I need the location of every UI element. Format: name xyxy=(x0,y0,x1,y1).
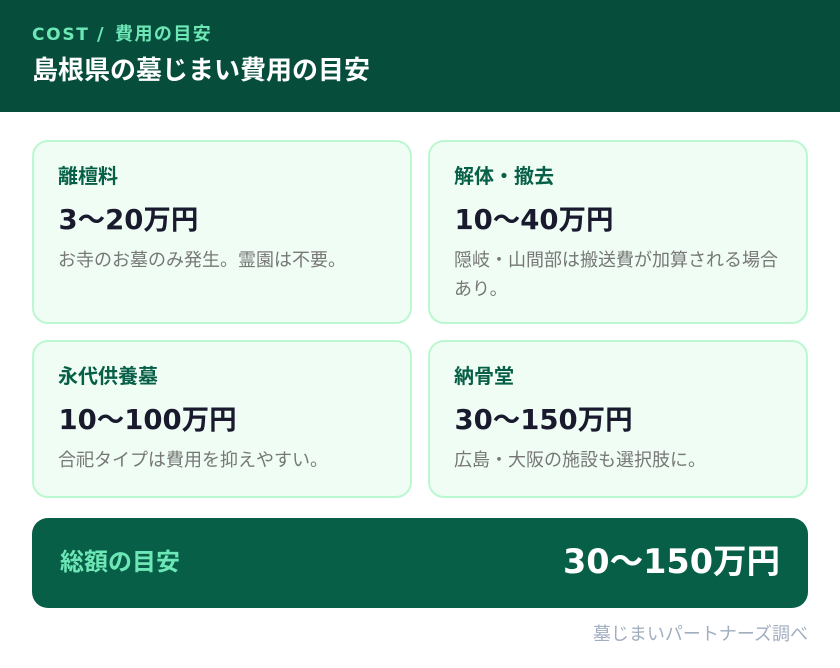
eyebrow label: / xyxy=(97,24,104,45)
label: 永代供養墓 xyxy=(58,364,158,388)
title: 島根県の墓じまい費用の目安 xyxy=(32,56,370,86)
value: 3〜20万円 xyxy=(58,204,198,236)
panel: 永代供養墓 xyxy=(32,340,412,498)
value: 10〜100万円 xyxy=(58,404,237,436)
panel: 離檀料 xyxy=(32,140,412,324)
panel: 解体・撤去 xyxy=(428,140,808,324)
total value: 30〜150万円 xyxy=(563,542,780,581)
header band xyxy=(0,0,840,112)
note: 隠岐・山間部は搬送費が加算される場合あり。 xyxy=(454,250,778,300)
eyebrow label: 費用の目安 xyxy=(115,24,212,45)
note: 合祀タイプは費用を抑えやすい。 xyxy=(58,450,328,471)
value: 10〜40万円 xyxy=(454,204,614,236)
label: 離檀料 xyxy=(58,164,118,188)
total bar xyxy=(32,518,808,608)
label: 納骨堂 xyxy=(454,364,514,388)
total label: 総額の目安 xyxy=(60,548,180,576)
eyebrow label: COST xyxy=(32,25,90,45)
eyebrow label xyxy=(32,24,212,45)
note: 広島・大阪の施設も選択肢に。 xyxy=(454,450,706,471)
source note: 墓じまいパートナーズ調べ xyxy=(593,624,808,645)
value: 30〜150万円 xyxy=(454,404,633,436)
label: 解体・撤去 xyxy=(454,164,554,188)
note: お寺のお墓のみ発生。霊園は不要。 xyxy=(58,250,346,271)
panel: 納骨堂 xyxy=(428,340,808,498)
